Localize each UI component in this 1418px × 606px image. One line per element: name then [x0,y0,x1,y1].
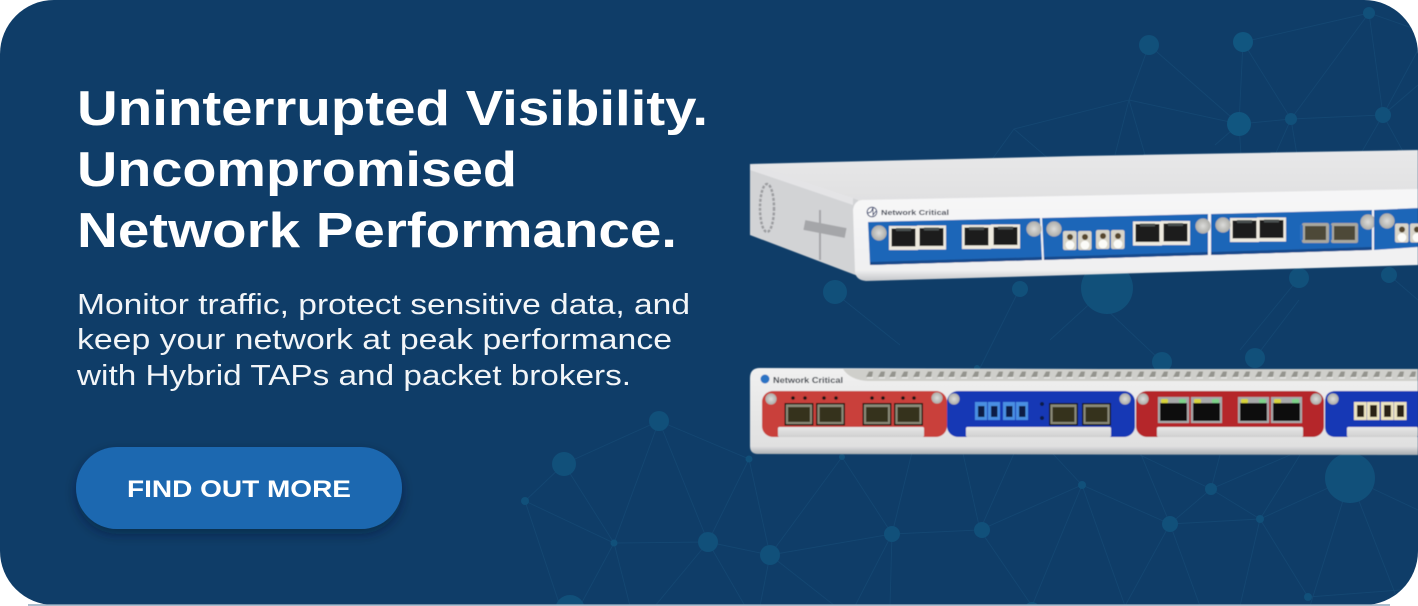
logo: Network Critical [867,207,949,217]
heading: Uncompromised [77,143,517,197]
logo: Network Critical [760,374,843,385]
network pattern [521,7,1418,606]
heading [77,82,708,258]
button: find out more [76,447,402,529]
module: red RJ45 [1136,391,1324,437]
module: blue fiber edge [1374,208,1418,250]
chassis side face [750,164,858,276]
bottom edge highlight [28,604,1390,606]
module: blue LC and SFP [947,391,1135,437]
module: blue RJ45 and SFP [1211,210,1376,255]
description text: keep your network at peak performance [77,324,672,356]
heading: Network Performance. [77,204,677,258]
module: blue RJ45 1 [868,218,1042,265]
top device: Network Critical TAP chassis [750,150,1418,281]
logo: Network Critical: Network Critical [881,208,949,217]
chassis body [750,368,1418,455]
bottom device: Network Critical packet broker [750,368,1418,455]
chassis front face [853,189,1418,281]
vent strip [843,369,1418,381]
button: find out more: FIND OUT MORE [127,476,351,503]
description text: with Hybrid TAPs and packet brokers. [76,360,631,392]
module: red SFP [762,391,947,437]
module: blue LC edge [1325,391,1418,437]
chassis top face [750,150,1418,202]
description text: Monitor traffic, protect sensitive data, and [77,289,690,321]
heading: Uninterrupted Visibility. [77,82,708,136]
module: blue fiber and RJ45 [1042,214,1211,260]
description text [76,289,690,392]
logo: Network Critical: Network Critical [773,376,843,385]
